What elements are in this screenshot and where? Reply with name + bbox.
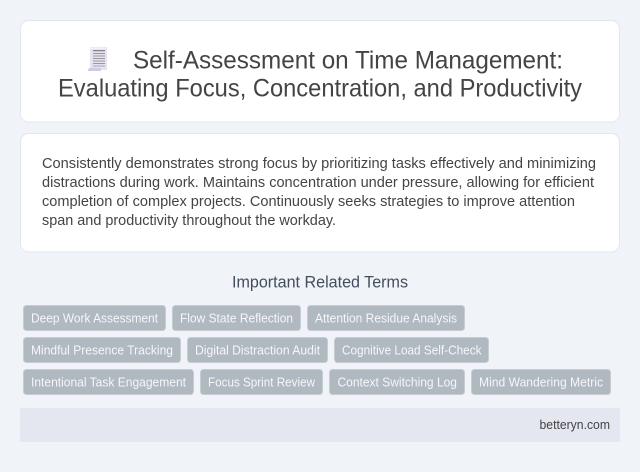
tag: context switching log: Context Switching Log	[338, 375, 457, 389]
tag: attention residue analysis: Attention Residue Analysis	[315, 311, 457, 325]
tag: attention residue analysis	[308, 306, 464, 330]
tag: digital distraction audit	[188, 338, 328, 362]
tag list	[24, 306, 610, 394]
tag: deep work assessment	[24, 306, 166, 330]
tag: intentional task engagement	[24, 370, 194, 394]
heading: important related terms: Important Related Terms	[232, 274, 408, 292]
text block: description: Consistently demonstrates strong focus by prioritizing tasks effectively and minimizing	[42, 156, 596, 172]
footer credit: betteryn.com	[540, 418, 610, 432]
tag: cognitive load self-check	[334, 338, 488, 362]
text block: description: span and productivity throughout the workday.	[42, 213, 336, 229]
tag: mindful presence tracking	[24, 338, 180, 362]
title: Self-Assessment on Time Management:	[133, 46, 563, 74]
tag: intentional task engagement: Intentional Task Engagement	[31, 375, 187, 389]
tag: flow state reflection: Flow State Reflection	[180, 311, 293, 325]
tag: cognitive load self-check: Cognitive Load Self-Check	[342, 343, 482, 357]
tag: focus sprint review: Focus Sprint Review	[208, 375, 316, 389]
tag: deep work assessment: Deep Work Assessment	[31, 311, 159, 325]
panel: description card	[20, 134, 620, 252]
title	[58, 46, 582, 102]
tag: focus sprint review	[200, 370, 322, 394]
tag: mindful presence tracking: Mindful Presence Tracking	[31, 343, 173, 357]
title: Evaluating Focus, Concentration, and Productivity	[58, 74, 582, 102]
tag: mind wandering metric: Mind Wandering Metric	[479, 375, 603, 389]
text block: description: completion of complex projects. Continuously seeks strategies to improve attention	[42, 194, 575, 210]
tag: context switching log	[330, 370, 464, 394]
icon: scroll document	[88, 47, 107, 71]
tag: digital distraction audit: Digital Distraction Audit	[195, 343, 321, 357]
tag: mind wandering metric	[472, 370, 610, 394]
text block: description	[42, 156, 596, 229]
text block: description: distractions during work. Maintains concentration under pressure, allowing for efficient	[42, 175, 594, 191]
footer bar	[20, 408, 620, 442]
tag: flow state reflection	[172, 306, 300, 330]
panel: title card	[20, 20, 620, 122]
